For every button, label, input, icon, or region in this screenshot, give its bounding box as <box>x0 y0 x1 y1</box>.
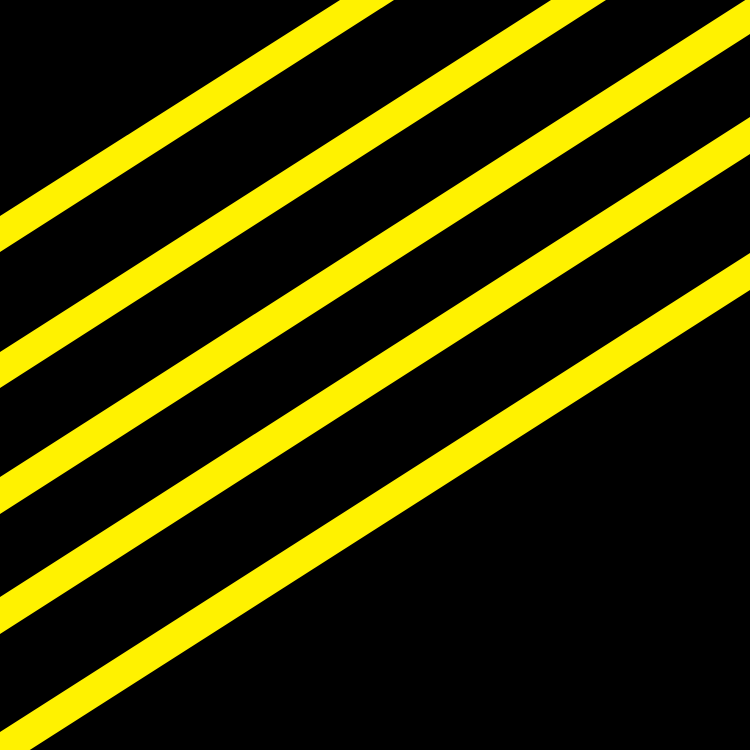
stripe 5 <box>0 253 750 750</box>
stripe 1 <box>0 0 394 252</box>
stripe 3 <box>0 0 750 514</box>
stripe 2 <box>0 0 606 388</box>
stripe 4 <box>0 117 750 634</box>
